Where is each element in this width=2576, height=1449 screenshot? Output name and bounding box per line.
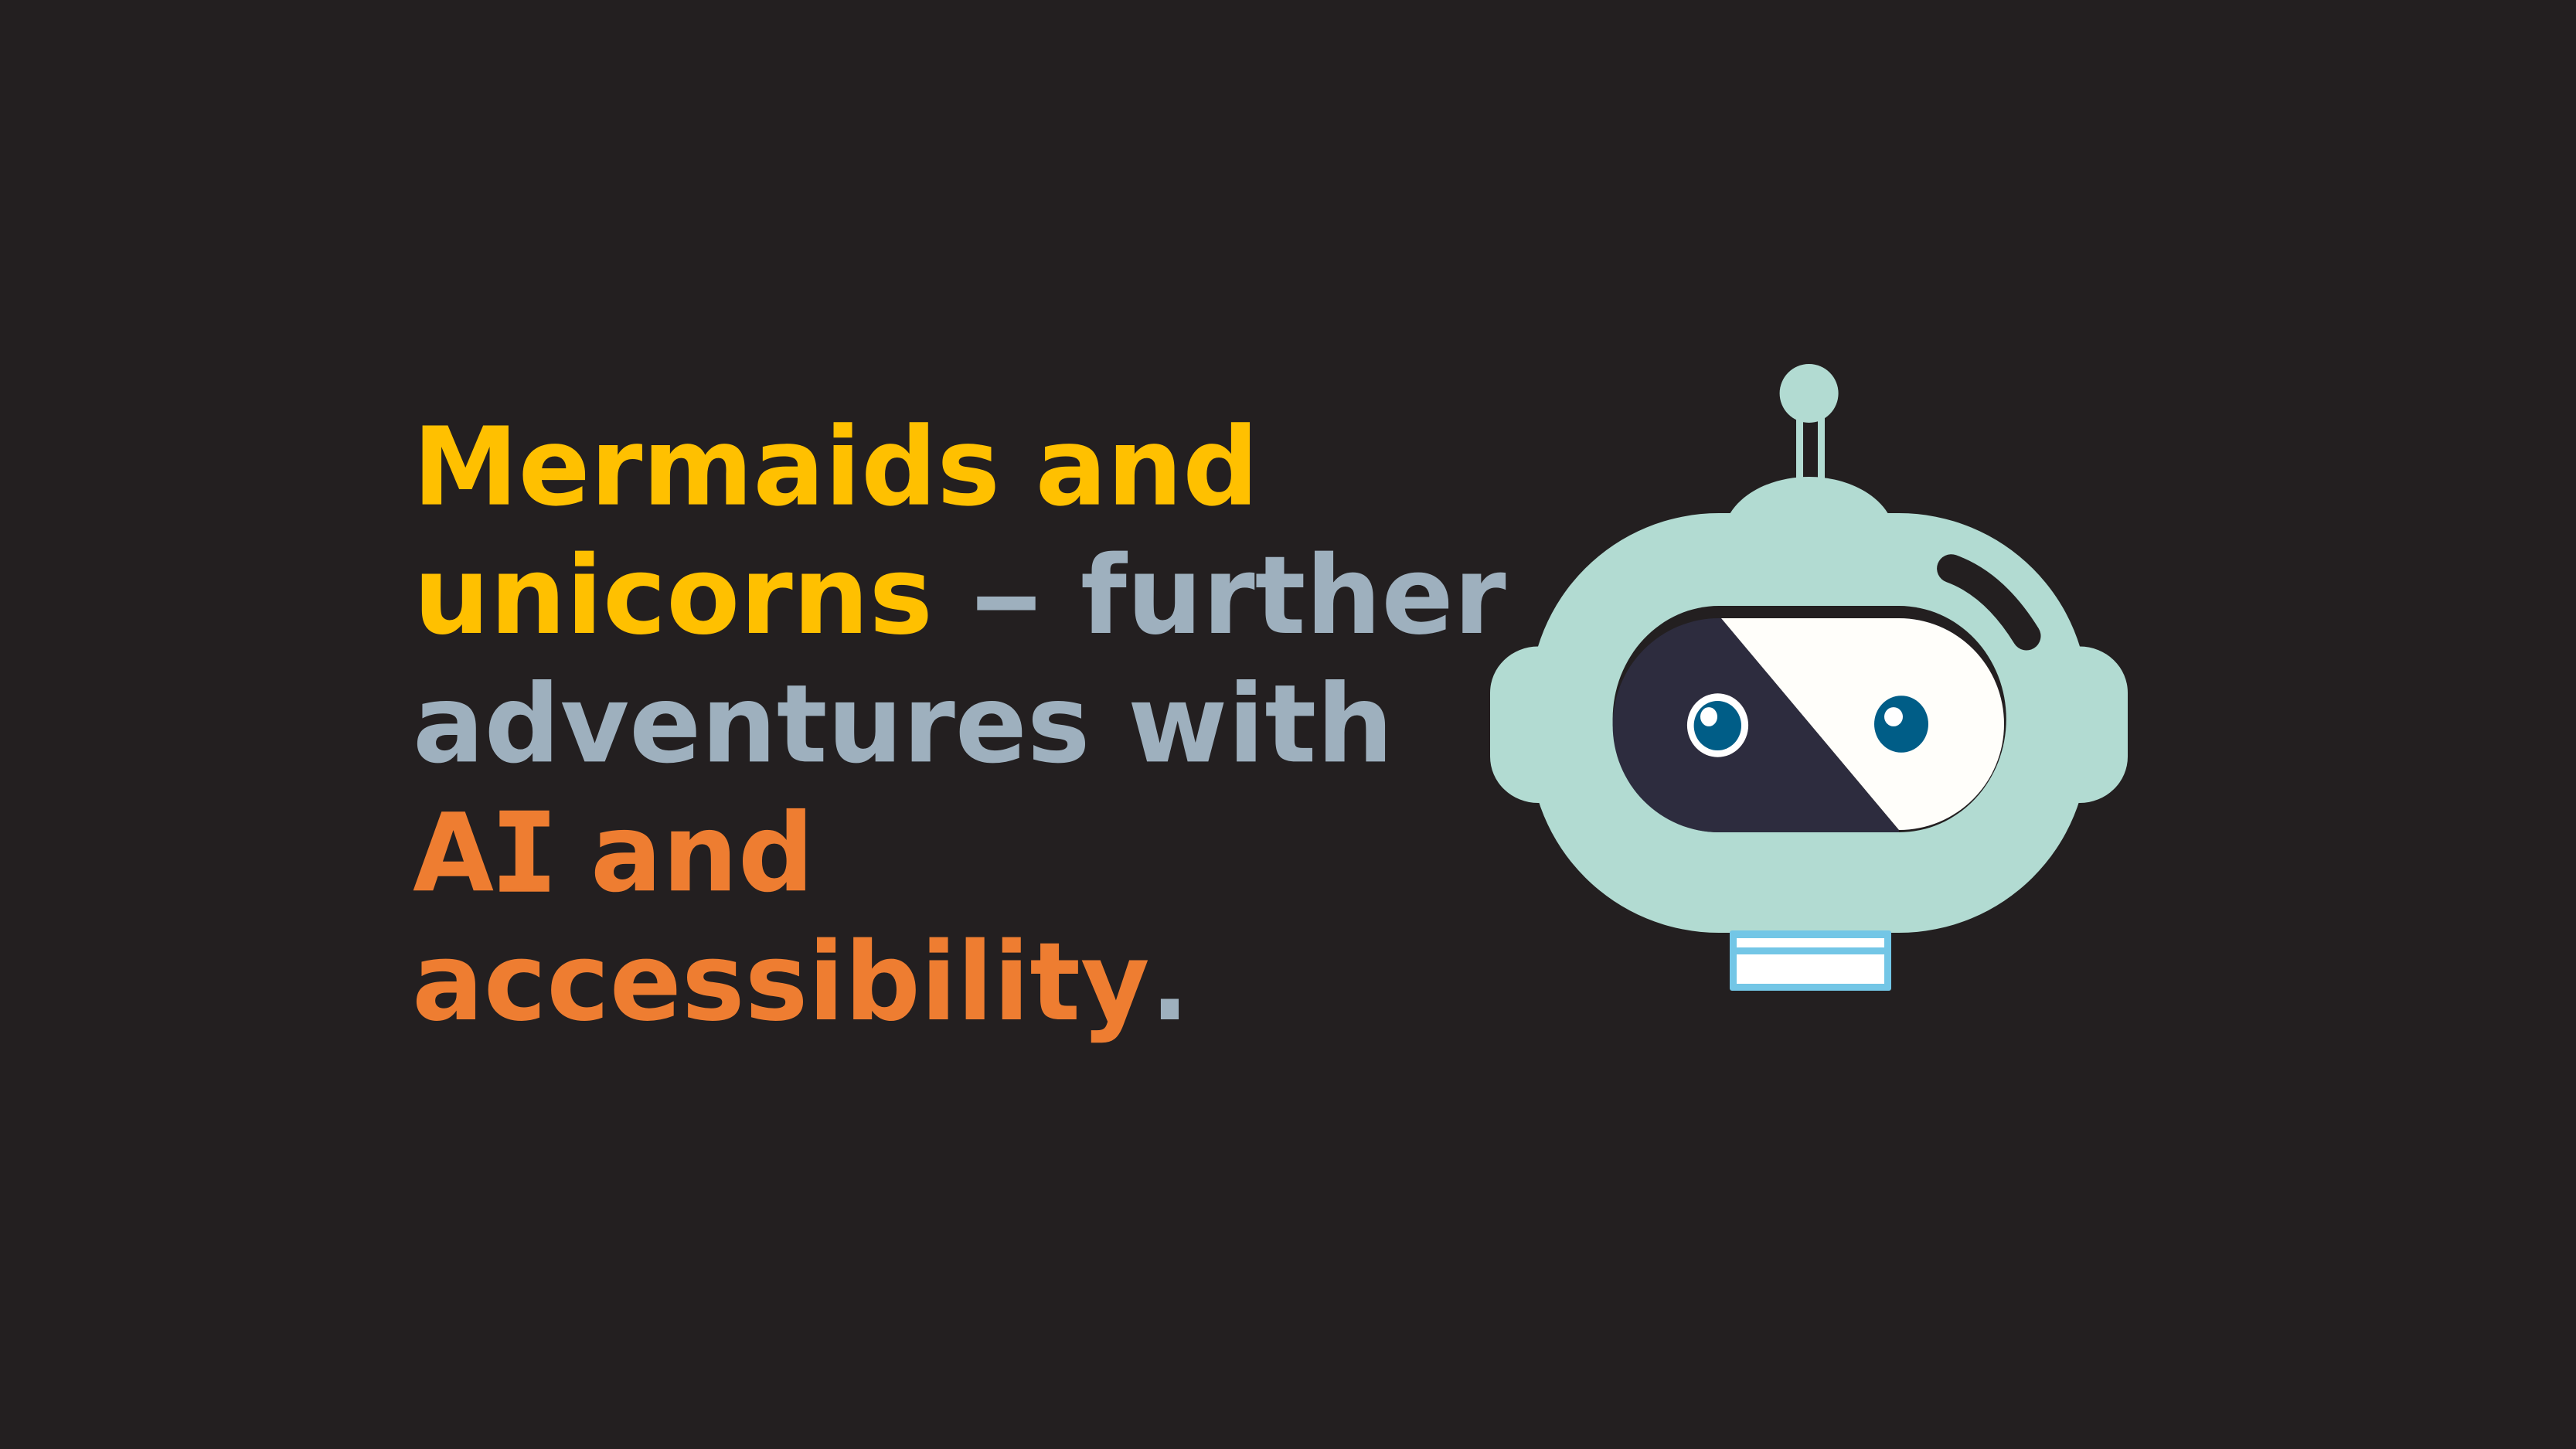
visor dark half xyxy=(1613,618,1899,832)
title: Mermaids and unicorns heading xyxy=(412,405,1506,1046)
heading line 1: and xyxy=(1036,405,1259,531)
left ear xyxy=(1490,646,1629,803)
antenna stem xyxy=(1796,410,1825,479)
head highlight xyxy=(1952,569,2026,636)
visor light half xyxy=(1721,618,2004,830)
heading line 2: further xyxy=(1080,533,1506,659)
right ear xyxy=(1989,646,2128,803)
head body xyxy=(1530,513,2088,933)
heading line 2 xyxy=(413,533,1506,659)
heading line 3: with xyxy=(1128,662,1393,787)
visor outline xyxy=(1613,606,2006,832)
neck box xyxy=(1730,930,1891,991)
heading line 3: adventures xyxy=(413,662,1090,787)
icon: robot head xyxy=(1490,364,2128,991)
head dome xyxy=(1730,477,1887,513)
heading line 5: accessibility xyxy=(412,920,1150,1046)
left eye xyxy=(1687,693,1748,757)
heading line 4 xyxy=(413,791,814,917)
heading line 2: – xyxy=(969,533,1043,659)
heading line 4: and xyxy=(590,791,814,917)
antenna ball xyxy=(1780,364,1839,423)
heading line 4: I xyxy=(492,791,557,917)
heading line 2: unicorns xyxy=(413,533,933,659)
heading line 5: . xyxy=(1150,920,1189,1046)
heading line 1: Mermaids xyxy=(413,405,1000,531)
heading line 4: A xyxy=(413,791,494,917)
right eye xyxy=(1874,696,1928,753)
